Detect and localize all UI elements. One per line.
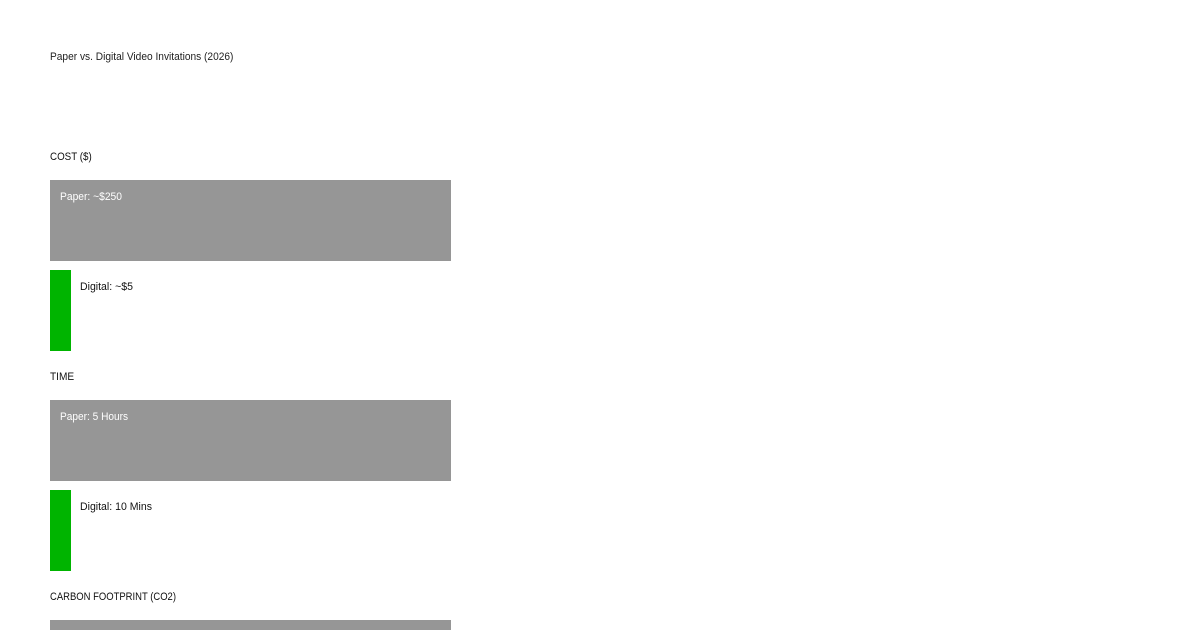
bar: paper cost (50, 180, 451, 261)
label: paper time: Paper: 5 Hours (60, 411, 128, 423)
section heading: carbon footprint: CARBON FOOTPRINT (CO2) (50, 591, 176, 603)
bar: paper carbon footprint (50, 620, 451, 630)
bar: digital cost (50, 270, 71, 351)
section heading: time: TIME (50, 371, 74, 383)
bar: digital time (50, 490, 71, 571)
title: Paper vs. Digital Video Invitations (2026) (50, 51, 233, 63)
label: digital time: Digital: 10 Mins (80, 501, 152, 513)
label: paper cost: Paper: ~$250 (60, 191, 122, 203)
label: digital cost: Digital: ~$5 (80, 281, 133, 293)
bar: paper time (50, 400, 451, 481)
section heading: cost: COST ($) (50, 151, 92, 163)
